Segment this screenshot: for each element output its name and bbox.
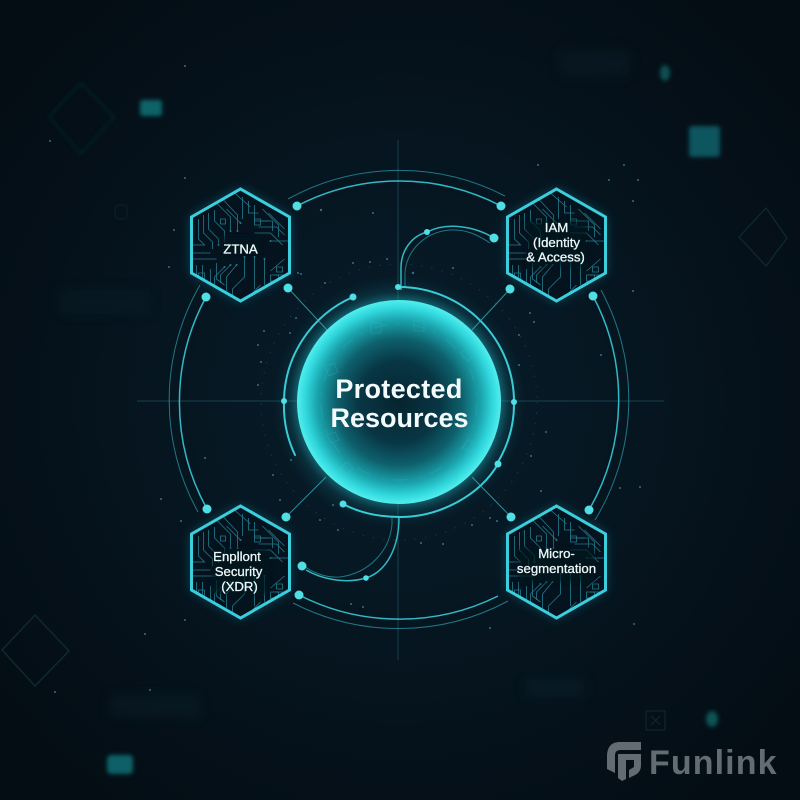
outer arc ring — [169, 170, 629, 629]
left outer arcs — [169, 285, 207, 512]
crosshair lines — [137, 140, 664, 660]
central sphere: protected resources — [297, 300, 501, 504]
S-curve connector to IAM — [401, 226, 498, 290]
label: Micro- — [538, 546, 575, 561]
label: (Identity — [533, 235, 580, 250]
scattered particles — [49, 65, 641, 693]
label: (XDR) — [221, 579, 258, 594]
label: & Access) — [526, 250, 585, 264]
label: Security — [215, 564, 263, 579]
label: IAM — [545, 220, 568, 235]
central sphere: protected resources: Resources — [330, 403, 469, 433]
top outer arcs — [288, 170, 505, 206]
label: Enpllont — [213, 549, 261, 564]
logo icon — [607, 742, 641, 781]
dashed radial dots around sphere — [261, 264, 537, 540]
node dots — [202, 202, 598, 600]
bottom outer arcs — [293, 595, 508, 629]
hexagon: Micro-segmentation — [506, 506, 606, 618]
logo text: Funlink — [649, 744, 778, 782]
hexagon: Endpoint Security — [190, 506, 290, 618]
sphere glow — [271, 274, 527, 530]
S-curve connector to Endpoint Security — [298, 517, 399, 581]
hexagon: IAM — [506, 189, 606, 301]
inner ring arcs — [284, 287, 514, 517]
hexagon: ZTNA — [190, 189, 290, 301]
sphere title: Protected — [335, 374, 463, 404]
sphere inner circuit texture — [309, 312, 489, 492]
label: ZTNA — [223, 242, 258, 256]
right outer arcs — [589, 290, 629, 520]
connector lines from sphere to hexagons — [286, 288, 511, 517]
watermark: Funlink logo — [607, 742, 778, 782]
label: segmentation — [517, 561, 596, 576]
